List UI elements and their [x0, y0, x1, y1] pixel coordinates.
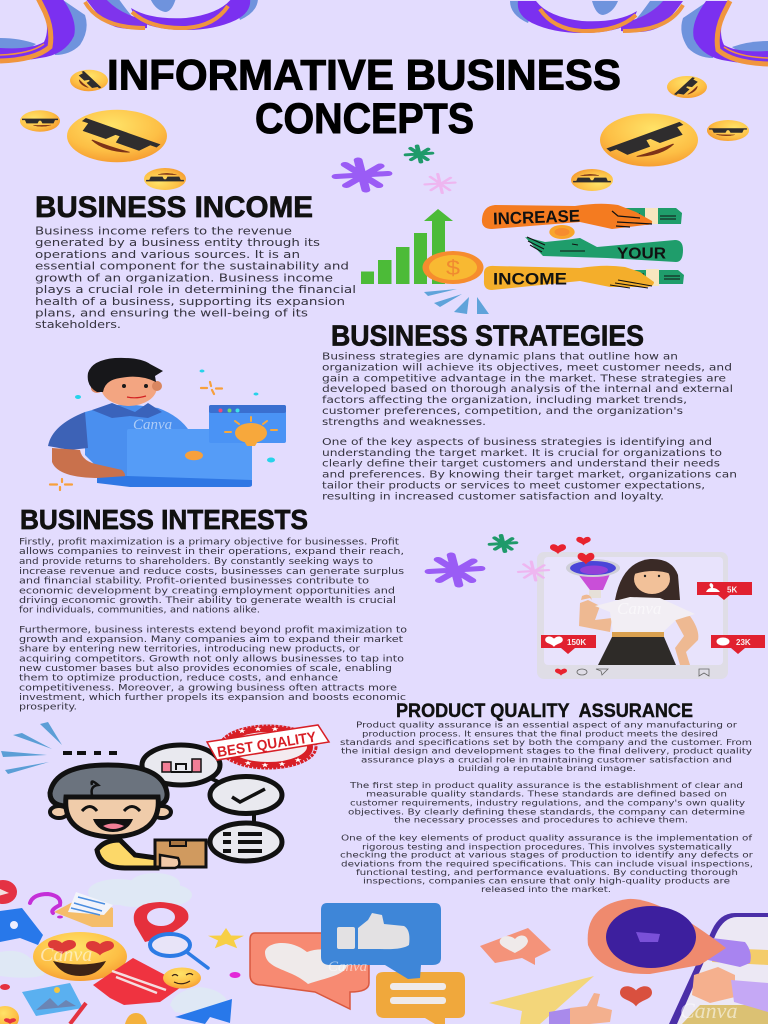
heading: business income: BUSINESS INCOME [35, 191, 313, 224]
text block: business income: Business income refers to the revenue [35, 226, 292, 238]
megaphone cone [588, 899, 726, 974]
title: CONCEPTS [255, 95, 474, 143]
bubble: bars [142, 745, 220, 785]
text block: business interests: economic development by creating employment opportunities and [19, 586, 395, 596]
bubble: check [210, 776, 282, 814]
text block: business strategies: resulting in increased customer satisfaction and loyalty. [322, 491, 664, 502]
best quality stamp: BEST QUALITY [216, 729, 318, 761]
text block: business income: stakeholders. [35, 320, 121, 331]
icon: sparkle stars middle [429, 536, 548, 585]
left arm [579, 600, 612, 632]
text block: business income [35, 226, 356, 331]
lightbulb [225, 417, 277, 446]
heading: product quality assurance: PRODUCT QUALITY ASSURANCE [396, 700, 693, 722]
label: your: YOUR [617, 246, 666, 262]
watermark: Canva [133, 417, 172, 433]
black dashes [63, 751, 117, 755]
sleeve [731, 980, 768, 1012]
hair [615, 559, 680, 600]
text block: business interests: acquiring competitors. Growth not only allows businesses to tap into [19, 654, 404, 664]
text block: business interests: Firstly, profit maximization is a primary objective for businesses. Profit [19, 537, 400, 547]
text block: business strategies: understanding the target market. It is crucial for organizations to [322, 448, 722, 459]
text block: business income: plans, and ensuring the well-being of its [35, 308, 308, 320]
comment bubble [376, 972, 465, 1024]
blue chat left [0, 908, 43, 945]
text block: business interests: and provide returns to shareholders. By constantly seeking ways to [19, 557, 373, 567]
text block: business interests: new customer bases but also provides economies of scale, enabling [19, 664, 392, 674]
text block: product quality assurance: Product quality assurance is an essential aspect of any manufacturing or [356, 721, 738, 730]
blue rays [1, 722, 62, 774]
text block: product quality assurance: deviations from the required specifications. This can include visual inspections, [341, 859, 753, 868]
hand lines top [612, 211, 652, 227]
sleeve [48, 412, 88, 450]
text block: business strategies: customer preferences, competition, and the organization's [322, 406, 683, 417]
text block: business strategies: clearly define their target customers and understand their needs [322, 459, 720, 470]
text block: business interests: for individuals, communities, and nations alike. [19, 606, 260, 616]
heart bubble [250, 933, 369, 1009]
hand: income [484, 266, 654, 290]
illustration: small heart bubble [480, 928, 551, 965]
hand lines green [527, 237, 585, 252]
heading: business strategies: BUSINESS STRATEGIES [331, 320, 644, 352]
badge: 5K [697, 582, 752, 600]
megaphone handle [708, 938, 751, 967]
hand [692, 967, 735, 1003]
illustration: thumbs-up hand [549, 993, 612, 1024]
text block: product quality assurance: the initial design and development stages to the final delivery, product quality [341, 747, 752, 756]
text block: product quality assurance: released into the market. [481, 885, 611, 894]
magnifier [150, 934, 208, 968]
location pin [134, 902, 188, 942]
title: INFORMATIVE BUSINESS [107, 52, 621, 100]
hair [88, 358, 163, 392]
envelope [54, 892, 113, 927]
watermark: Canva [617, 599, 661, 618]
text block: business strategies: gain a competitive advantage in the market. These strategies are [322, 373, 726, 384]
bubble: list [210, 823, 282, 861]
text block: product quality assurance: assurance plays a crucial role in maintaining customer satisfaction and [361, 755, 732, 764]
laptop [97, 429, 252, 487]
red card [93, 958, 184, 1005]
browser window [209, 405, 286, 443]
text block: business interests: them to optimize production, reduce costs, and enhance [19, 674, 338, 684]
text block: product quality assurance: building a reputable brand image. [458, 764, 636, 773]
best quality stamp [207, 725, 329, 768]
text block: business income: health of a business, supporting its expansion [35, 297, 345, 308]
text block: product quality assurance: the necessary processes and procedures to achieve them. [394, 816, 688, 825]
icon: small red heart [620, 986, 652, 1006]
heart-eyes emoji [33, 932, 127, 981]
collar [92, 403, 162, 418]
text block: business strategies: and preferences. By knowing their target market, organizations can [322, 470, 737, 481]
illustration: social icons lower left [0, 873, 244, 1024]
money bottom [620, 269, 684, 286]
text block: business interests: competitiveness. Moreover, a growing business often attracts more [19, 683, 397, 693]
text block: business income: operations and various sources. It is an [35, 250, 300, 261]
hand lines bottom [610, 280, 652, 288]
illustration: boy with quality icons [1, 722, 329, 868]
badge: 150K: 150K [567, 638, 586, 647]
face [66, 797, 158, 837]
text block: product quality assurance [340, 721, 754, 894]
text block: product quality assurance: objectives. By clearly defining these standards, the company can determine [348, 807, 745, 816]
megaphone detail [636, 932, 660, 942]
illustration: phone with hand and megaphone [588, 899, 768, 1024]
skirt [598, 637, 676, 665]
star [208, 928, 244, 948]
illustration: heart, like and comment bubbles [250, 903, 465, 1024]
watermark: Canva [680, 998, 737, 1023]
money top [618, 208, 682, 224]
like bubble [321, 903, 441, 979]
body yellow [97, 840, 157, 868]
face [634, 562, 671, 594]
text block: business strategies: tailor their products or services to meet customer expectations, [322, 480, 705, 492]
text block: business income: growth of an organization. Business income [35, 273, 333, 284]
red dot [0, 984, 10, 990]
chart icon: growth bars with arrow and coin: $ [446, 257, 460, 280]
red circle chip [0, 880, 17, 904]
text block: business interests: share by entering new territories, introducing new products, or [19, 645, 361, 655]
watermark: Canva [328, 959, 367, 975]
post action icons [555, 669, 709, 676]
heading: business interests: BUSINESS INTERESTS [20, 504, 308, 535]
shirt [595, 597, 695, 633]
shirt [85, 404, 190, 480]
emoji bottom-left [0, 1006, 19, 1024]
post frame [537, 552, 728, 679]
badge: 5K: 5K [727, 586, 737, 594]
text block: business interests: investment, which further propels its expansion and boosts economic [19, 693, 406, 703]
text block: business interests: growth and expansion. Many companies aim to expand their market [19, 635, 404, 645]
title [107, 52, 621, 143]
cloud bottom [170, 987, 230, 1014]
text block: product quality assurance: production process. It ensures that the final product meets the desired [362, 729, 718, 738]
belt [612, 632, 664, 637]
text block: product quality assurance: standards and specifications set by both the company and the customer. From [340, 738, 752, 747]
illustration: yellow paper plane [489, 976, 594, 1024]
bell [125, 1013, 147, 1024]
hair [50, 765, 167, 806]
hand: your [525, 237, 683, 262]
arm [52, 448, 125, 479]
text block: business interests [19, 537, 407, 712]
text block: business strategies [322, 352, 737, 502]
question mark [30, 894, 63, 918]
flag pole [70, 1003, 86, 1024]
head [91, 368, 162, 406]
decorative ribbon: top right [510, 1, 768, 64]
small smile emoji [163, 968, 201, 988]
text block: business interests: Furthermore, business interests extend beyond profit maximization to [19, 625, 407, 635]
label: increase: INCREASE [493, 206, 580, 228]
text block: business interests: allows companies to reinvest in their operations, expand their reach, [19, 547, 404, 557]
illustration: increase your income hands [482, 204, 684, 290]
coin small [549, 225, 575, 239]
illustration: man with laptop [48, 358, 286, 490]
sparkles and dots [50, 370, 275, 490]
text block: product quality assurance: rigorous testing and inspection procedures. This involves systematically [362, 842, 732, 851]
badge: 23K: 23K [736, 638, 751, 647]
text block: business strategies: strengths and weaknesses. [322, 417, 486, 428]
hand: increase [482, 204, 652, 229]
decorative ribbon: top left [0, 0, 258, 61]
text block: business interests: increase revenue and reduce costs, businesses can generate surplus [19, 567, 405, 577]
badge: 150K [541, 635, 596, 654]
badge: 23K [711, 635, 765, 654]
text block: product quality assurance: functional testing, and performance evaluations. By conducting thorough [356, 868, 738, 877]
icon: sunglasses emojis left [12, 66, 194, 194]
megaphone inner [606, 906, 696, 968]
cloud lower left [0, 951, 44, 978]
icon: sparkle stars top [336, 146, 455, 193]
text block: product quality assurance: One of the key elements of product quality assurance is the implementation of [341, 834, 752, 843]
icon: sunglasses emojis right [563, 72, 757, 195]
eyes and mouth [82, 782, 140, 832]
chart icon: growth bars with arrow and coin [361, 209, 489, 314]
label: income: INCOME [493, 270, 567, 288]
heart-eyes emoji: Canva [40, 944, 92, 966]
text block: product quality assurance: inspections, companies can ensure that only high-quality products are [363, 876, 730, 885]
text block: business strategies: factors affecting the organization, including market trends, [322, 395, 687, 406]
illustration: woman with megaphone in social post frame [537, 537, 765, 679]
right arm [674, 616, 698, 665]
text block: business interests: prosperity. [19, 702, 77, 712]
text block: business income: essential component for the sustainability and [35, 262, 349, 273]
package box [155, 840, 206, 868]
text block: business strategies: One of the key aspects of business strategies is identifying and [322, 437, 712, 448]
text block: product quality assurance: checking the product at various stages of production to identify any defects or [340, 851, 754, 860]
hearts [550, 537, 594, 564]
text block: product quality assurance: customer requirements, industry regulations, and the company's own quality [350, 798, 745, 808]
blue paper plane [175, 999, 232, 1024]
cloud top [88, 873, 192, 907]
text block: business strategies: Business strategies are dynamic plans that outline how an [322, 352, 678, 362]
text block: business strategies: developed based on thorough analysis of the internal and external [322, 384, 733, 395]
image card [22, 983, 83, 1016]
phone [669, 913, 768, 1024]
text block: business income: plays a crucial role in determining the financial [35, 285, 356, 296]
text block: product quality assurance: measurable quality standards. These standards are defined based on [366, 790, 727, 799]
text block: product quality assurance: The first step in product quality assurance is the establishment of clear and [349, 781, 743, 790]
text block: business interests: and financial stability. Profit-oriented businesses contribute to [19, 577, 369, 587]
text block: business strategies: organization will achieve its objectives, meet customer needs, and [322, 362, 732, 374]
text block: business income: generated by a business entity through its [35, 238, 320, 249]
ears [50, 806, 171, 818]
megaphone [566, 559, 620, 600]
connectors [210, 778, 254, 825]
text block: business interests: driving economic growth. Their ability to generate wealth is crucial [19, 596, 396, 606]
magenta dot [230, 972, 240, 978]
